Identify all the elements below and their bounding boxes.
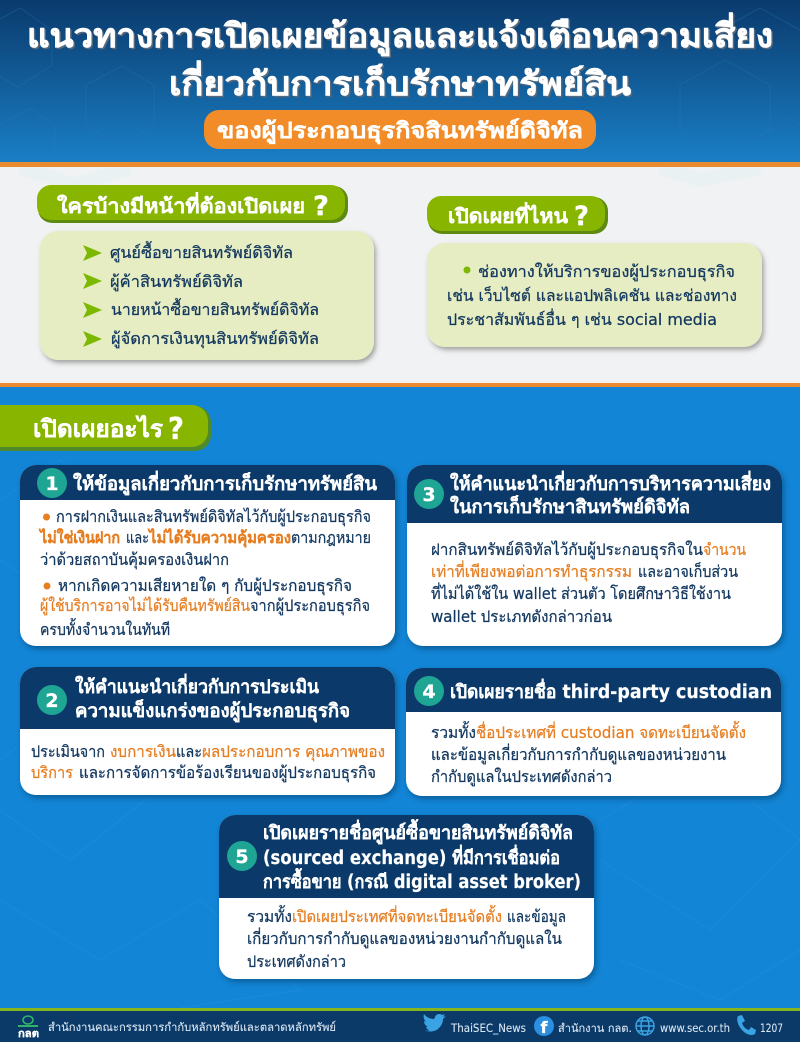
list box: who must disclose (40, 231, 374, 360)
card 5 body: รวมทั้ง (247, 905, 292, 926)
card 1 header: ให้ข้อมูลเกี่ยวกับการเก็บรักษาทรัพย์สิน (73, 470, 377, 496)
text box: where to disclose: ช่องทางให้บริการของผู้ประกอบธุรกิจ (478, 262, 735, 282)
card 4 header (406, 668, 781, 712)
card 1 body: ผู้ใช้บริการอาจไม่ได้รับคืนทรัพย์สิน (40, 596, 250, 616)
card 1 header: 1 (45, 473, 59, 495)
heading: what to disclose: เปิดเผยอะไร (33, 414, 163, 443)
card 2 body: ผลประกอบการ คุณภาพของ (202, 742, 385, 762)
subtitle pill (204, 110, 596, 149)
header banner (0, 0, 800, 163)
card 3 header: ในการเก็บรักษาสินทรัพย์ดิจิทัล (450, 494, 690, 518)
card 1 header (20, 465, 395, 500)
twitter handle: ThaiSEC_News (450, 1021, 526, 1035)
card 1 body: ครบทั้งจำนวนในทันที (40, 618, 170, 639)
list box: who must disclose: ศูนย์ซื้อขายสินทรัพย์ดิจิทัล (110, 241, 293, 263)
card 5 body: ประเทศดังกล่าว (247, 952, 346, 971)
card 2 header: ความแข็งแกร่งของผู้ประกอบธุรกิจ (75, 698, 350, 723)
icon: twitter bird (422, 1014, 446, 1032)
card 5 (219, 815, 594, 979)
card 2 header: 2 (45, 690, 59, 712)
card 1 body: และ (126, 528, 149, 547)
card 3 header: 3 (422, 484, 436, 506)
panel: who must disclose (37, 185, 374, 360)
text box: where to disclose (427, 243, 762, 347)
card 5 header: (sourced exchange) ที่มีการเชื่อมต่อ (263, 844, 560, 869)
card 3 (407, 465, 782, 646)
list box: who must disclose: นายหน้าซื้อขายสินทรัพย์ดิจิทัล (111, 298, 319, 319)
card 3 body: ที่ไม่ได้ใช้ใน wallet ส่วนตัว โดยศึกษาวิธีใช้งาน (431, 582, 731, 603)
subtitle pill: ของผู้ประกอบธุรกิจสินทรัพย์ดิจิทัล (217, 118, 583, 145)
card 5 header: เปิดเผยรายชื่อศูนย์ซื้อขายสินทรัพย์ดิจิทัล (263, 819, 573, 845)
card 3 body: wallet ประเภทดังกล่าวก่อน (431, 607, 612, 626)
card 4 body: ชื่อประเทศที่ custodian จดทะเบียนจัดตั้ง (476, 721, 746, 742)
main title: เกี่ยวกับการเก็บรักษาทรัพย์สิน (169, 60, 631, 103)
panel: where to disclose (427, 196, 762, 347)
icon: globe (636, 1017, 654, 1035)
card 2 (20, 667, 395, 795)
card 1 body (38, 507, 371, 639)
card 1 body: ไม่ได้รับความคุ้มครอง (147, 528, 291, 548)
card 5 body (247, 905, 566, 971)
card 5 body: เปิดเผยประเทศที่จดทะเบียนจัดตั้ง (292, 905, 502, 926)
card 4 body: และข้อมูลเกี่ยวกับการกำกับดูแลของหน่วยงาน (431, 743, 726, 765)
icon: SEC logo (18, 1016, 39, 1040)
facebook page name: สำนักงาน กลต. (558, 1021, 632, 1035)
card 2 header (20, 667, 395, 729)
text box: where to disclose: เช่น เว็บไซต์ และแอปพลิเคชัน และช่องทาง (447, 285, 737, 305)
main title: แนวทางการเปิดเผยข้อมูลและแจ้งเตือนความเสี่ยง (27, 12, 773, 57)
heading: what to disclose: ? (168, 412, 184, 447)
icon: phone (737, 1015, 756, 1035)
card 5 header: 5 (235, 846, 249, 868)
card 3 body: จำนวน (703, 540, 746, 559)
list box: who must disclose: ผู้จัดการเงินทุนสินทรัพย์ดิจิทัล (111, 329, 319, 349)
icon: facebook: f (541, 1018, 549, 1037)
card 2 body (31, 742, 385, 783)
card 3 header (407, 465, 782, 523)
card 5 header (219, 815, 594, 898)
card 3 body: และอาจเก็บส่วน (638, 561, 738, 581)
heading: who must disclose: ? (313, 191, 329, 222)
card 5 header: การซื้อขาย (กรณี digital asset broker) (263, 868, 581, 893)
card 1 body: ว่าด้วยสถาบันคุ้มครองเงินฝาก (40, 550, 229, 570)
card 2 body: และการจัดการข้อร้องเรียนของผู้ประกอบธุรกิจ (79, 763, 376, 783)
card 3 header: ให้คำแนะนำเกี่ยวกับการบริหารความเสี่ยง (450, 470, 771, 495)
footer (0, 1008, 800, 1042)
card 2 body: งบการเงิน (110, 742, 176, 761)
card 1 body: จากผู้ประกอบธุรกิจ (250, 596, 370, 616)
card 4 header: 4 (422, 681, 436, 703)
card 2 body: บริการ (31, 763, 73, 782)
card 2 body: ประเมินจาก (31, 742, 105, 761)
heading: who must disclose (37, 185, 348, 223)
icon: facebook (534, 1016, 554, 1037)
card 4 (406, 668, 781, 796)
heading: where to disclose (427, 196, 608, 234)
website: www.sec.or.th (660, 1021, 730, 1035)
text box: where to disclose: ประชาสัมพันธ์อื่น ๆ เช่น social media (447, 308, 717, 329)
heading: what to disclose (0, 405, 211, 451)
card 3 body: เท่าที่เพียงพอต่อการทำธุรกรรม (431, 560, 632, 582)
card 5 body: และข้อมูล (507, 907, 566, 927)
card 4 body: รวมทั้ง (431, 721, 476, 742)
heading: who must disclose: ใครบ้างมีหน้าที่ต้องเปิดเผย (57, 191, 305, 218)
card 1 (20, 465, 395, 646)
card 4 header: เปิดเผยรายชื่อ third-party custodian (450, 678, 772, 703)
card 1 body: ตามกฎหมาย (291, 528, 371, 547)
list box: who must disclose: ผู้ค้าสินทรัพย์ดิจิทัล (110, 272, 243, 292)
phone number: 1207 (760, 1021, 783, 1035)
card 2 header: ให้คำแนะนำเกี่ยวกับการประเมิน (75, 673, 319, 698)
card 4 body: กำกับดูแลในประเทศดังกล่าว (431, 767, 612, 787)
card 3 body: ฝากสินทรัพย์ดิจิทัลไว้กับผู้ประกอบธุรกิจใน (431, 540, 703, 560)
card 2 body: และ (176, 742, 202, 761)
card 3 body (431, 540, 746, 626)
footer organisation name: สำนักงานคณะกรรมการกำกับหลักทรัพย์และตลาดหลักทรัพย์ (48, 1020, 336, 1034)
card 1 body: หากเกิดความเสียหายใด ๆ กับผู้ประกอบธุรกิจ (58, 576, 352, 596)
main title (27, 12, 773, 103)
card 1 body: ไม่ใช่เงินฝาก (38, 528, 120, 547)
icon: SEC logo: กลต (18, 1029, 39, 1040)
card 1 body: การฝากเงินและสินทรัพย์ดิจิทัลไว้กับผู้ประกอบธุรกิจ (56, 507, 371, 527)
heading: where to disclose: เปิดเผยที่ไหน (448, 201, 568, 228)
card 4 body (431, 721, 746, 787)
card 5 body: เกี่ยวกับการกำกับดูแลของหน่วยงานกำกับดูแลใน (247, 927, 562, 949)
heading: where to disclose: ? (574, 201, 589, 232)
